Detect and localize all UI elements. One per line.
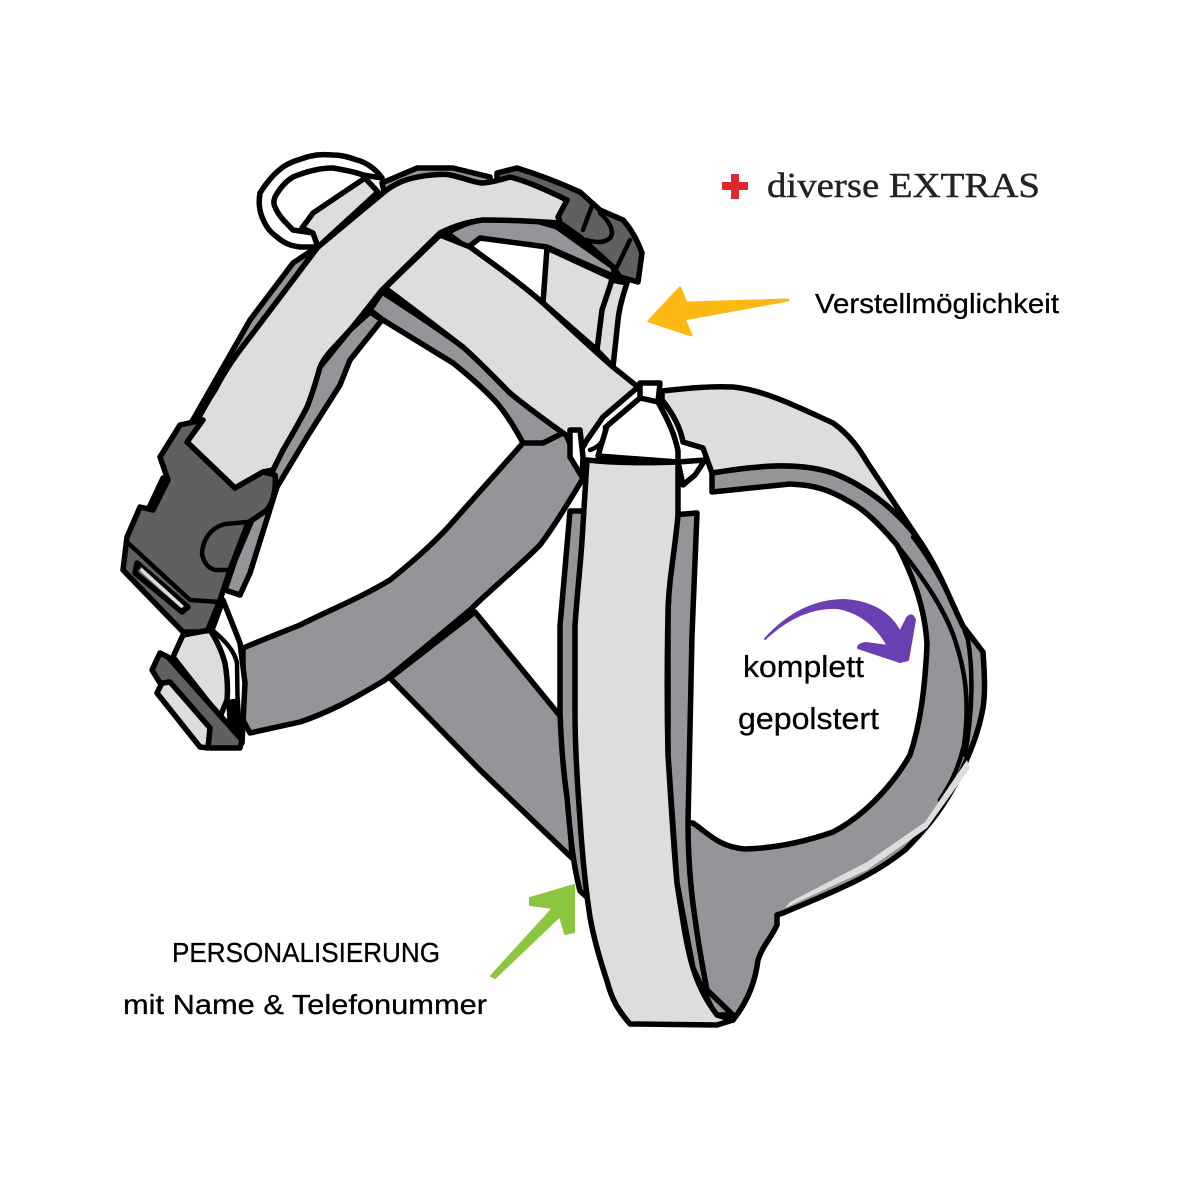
label: personalisation: [123, 937, 487, 1020]
junction ring and white connector: [570, 383, 705, 485]
small strap at D-ring: [302, 178, 378, 247]
heading: diverse EXTRAS: diverse EXTRAS: [767, 166, 1040, 205]
rear light panel: [543, 248, 612, 350]
right loop: grey padded body: [680, 466, 984, 1020]
thin adjustment strap: [597, 280, 627, 367]
label: komplett gepolstert: [738, 649, 879, 736]
grey arc behind buckle: [447, 218, 615, 277]
arrow: yellow adjustment arrow: [649, 288, 788, 335]
main collar strap: [187, 174, 567, 488]
label: personalisation: PERSONALISIERUNG: [172, 937, 440, 968]
outer rim of collar: [190, 247, 317, 425]
lower buckle strap: [173, 600, 245, 743]
lower left grey strap: [243, 433, 585, 733]
label: personalisation: mit Name & Telefonummer: [123, 989, 487, 1020]
label: komplett gepolstert: gepolstert: [738, 701, 879, 736]
lower buckle clip: [152, 653, 242, 748]
harness illustration: [123, 155, 984, 1025]
D-ring: [259, 155, 382, 247]
label: komplett gepolstert: komplett: [743, 649, 864, 684]
front side-release buckle: [123, 420, 275, 632]
thin dark rim on collar: [382, 168, 490, 195]
right loop: light outer strip: [662, 387, 917, 537]
collar lower grey strip: [225, 312, 382, 595]
chest strap (diagonal): [390, 612, 572, 858]
front strap: [575, 460, 733, 1025]
top side-release buckle: [497, 168, 642, 282]
label: Verstellmöglichkeit: Verstellmöglichkeit: [815, 288, 1059, 319]
front strap side rims: [560, 511, 733, 1015]
right loop: edge fold lines: [785, 537, 971, 908]
icon: red plus: [722, 174, 748, 199]
grey band under cross strap: [370, 292, 563, 443]
arrow: purple padding arrow: [765, 600, 915, 662]
cross strap: [385, 235, 638, 447]
arrow: green personalisation arrow: [491, 885, 574, 978]
